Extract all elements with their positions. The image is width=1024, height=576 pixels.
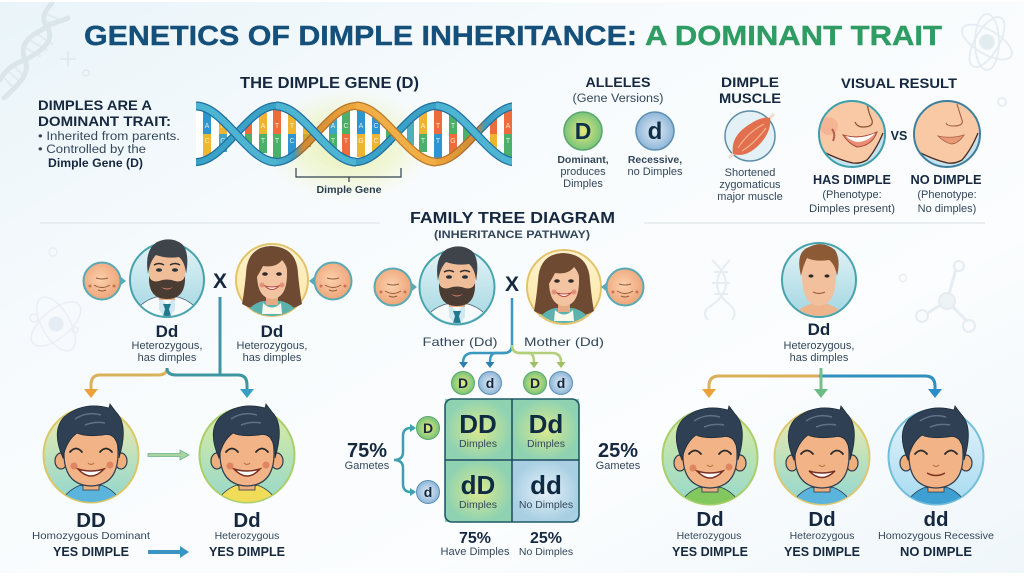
dna base letters: T — [451, 123, 456, 130]
stat: 75% have dimples: Have Dimples — [440, 546, 510, 558]
stat: 25% gametes: Gametes — [596, 460, 641, 472]
caption: Dd one: Heterozygous — [677, 530, 741, 542]
arrow: blue horizontal — [148, 546, 189, 558]
child DD portrait — [44, 404, 138, 505]
stat: 25% gametes: 25% — [598, 440, 638, 462]
panel: alleles: (Gene Versions) — [572, 93, 664, 105]
cross symbol: X — [213, 270, 227, 293]
icon: face without dimple — [911, 98, 983, 167]
caption: DD — [32, 509, 150, 559]
title: A DOMINANT TRAIT — [645, 20, 942, 51]
mother genotype: Dd — [261, 322, 283, 341]
dna base letters — [204, 123, 511, 145]
panel: visual result: (Phenotype: — [822, 189, 882, 201]
dna base letters: C — [373, 123, 379, 130]
dna base letters: C — [204, 138, 210, 145]
father genotype: Dd — [156, 322, 178, 341]
panel: left family — [32, 239, 352, 559]
panel: dimple muscle: MUSCLE — [719, 90, 781, 106]
panel: right family — [662, 243, 994, 559]
child dd portrait — [888, 406, 984, 507]
icon: dominant allele: D — [575, 118, 591, 144]
punnett square — [445, 399, 579, 522]
panel: visual result: NO DIMPLE — [910, 173, 982, 187]
dna base letters: C — [343, 123, 349, 130]
dna base letters: A — [331, 123, 336, 130]
cell dd: No Dimples — [519, 499, 573, 511]
caption: Dd: Heterozygous — [215, 530, 279, 542]
caption: Dd one: Dd — [696, 508, 724, 531]
cell dD: Dimples — [459, 499, 497, 511]
panel: visual result — [809, 75, 983, 215]
dominant caption: produces — [560, 166, 606, 178]
arrow: gamete pathway — [459, 298, 566, 368]
dna base letters: A — [205, 123, 210, 130]
caption: dd: dd — [923, 508, 949, 531]
caption: DD: YES DIMPLE — [53, 545, 129, 559]
icon: muscle — [725, 111, 775, 161]
father genotype — [132, 322, 202, 364]
caption: Dd two: Dd — [808, 508, 836, 531]
dna base letters: A — [421, 123, 426, 130]
text block: dominant trait intro — [38, 97, 180, 170]
mother portrait — [236, 244, 308, 324]
mother label: Mother (Dd) — [524, 335, 604, 349]
caption: Dd two: YES DIMPLE — [784, 545, 860, 559]
gamete alleles: d — [486, 375, 494, 391]
caption: dd: Homozygous Recessive — [878, 531, 994, 542]
panel: visual result: VISUAL RESULT — [841, 75, 957, 91]
heading: the dimple gene: THE DIMPLE GENE (D) — [240, 75, 419, 92]
child Dd portrait — [200, 404, 294, 505]
parent genotype: has dimples — [790, 352, 849, 364]
mother genotype: has dimples — [243, 352, 302, 364]
small mother dimple face — [601, 268, 644, 306]
child Dd blue portrait — [774, 406, 870, 507]
panel: alleles — [557, 74, 683, 190]
dna base letters: T — [436, 123, 441, 130]
gamete alleles: D — [530, 375, 540, 391]
dna base letters: T — [261, 138, 266, 145]
dna base letters: T — [421, 138, 426, 145]
heading: family tree diagram: FAMILY TREE DIAGRAM — [410, 210, 615, 227]
gene bracket — [296, 168, 401, 182]
stat: 75% have dimples — [440, 530, 510, 558]
icon: recessive allele: d — [648, 118, 662, 145]
title: GENETICS OF DIMPLE INHERITANCE: — [84, 20, 637, 51]
panel: dimple muscle: DIMPLE — [721, 74, 779, 90]
caption: Dd two: Heterozygous — [790, 530, 854, 542]
cell DD: Dimples — [459, 438, 497, 450]
decorative dna and molecule right — [705, 260, 975, 332]
arrow: green horizontal — [148, 450, 189, 460]
parent genotype: Dd — [808, 320, 830, 339]
panel: visual result: No dimples) — [918, 203, 976, 215]
stat: 25% no dimples: No Dimples — [519, 546, 573, 558]
cell DD: DD — [459, 409, 497, 439]
dna helix chart — [196, 86, 512, 196]
gamete alleles: D — [458, 375, 468, 391]
dna base letters: A — [359, 123, 364, 130]
dominant caption — [557, 154, 609, 190]
stat: 75% have dimples: 75% — [459, 530, 491, 547]
dna base letters: T — [275, 123, 280, 130]
panel: center punnett pathway — [345, 246, 644, 558]
dna base letters: C — [289, 138, 295, 145]
decorative atom left — [24, 248, 88, 357]
panel: dimple muscle: Shortened — [725, 167, 775, 179]
bracket arrow — [394, 424, 416, 496]
dna base letters: T — [331, 138, 336, 145]
mother portrait — [527, 250, 601, 331]
gene bracket label: Dimple Gene — [316, 185, 382, 196]
father label: Father (Dd) — [422, 335, 498, 349]
stat: 25% no dimples: 25% — [530, 530, 562, 547]
dna base letters: T — [275, 138, 280, 145]
panel: dimple muscle: zygomaticus — [719, 179, 781, 191]
arrow: left pathway — [84, 297, 254, 398]
cross symbol: X — [505, 273, 519, 296]
stat: 75% gametes: Gametes — [345, 460, 390, 472]
row alleles — [416, 416, 440, 504]
dna base letters: A — [221, 123, 226, 130]
cell Dd — [527, 409, 565, 450]
text block: dominant trait intro: Dimple Gene (D) — [48, 158, 143, 170]
parent genotype — [784, 320, 854, 364]
caption: Dd one — [672, 508, 748, 559]
small father dimple face — [374, 268, 417, 306]
panel: dimple muscle — [717, 74, 783, 203]
caption: Dd: Dd — [233, 509, 261, 532]
dna rungs — [196, 110, 512, 158]
dna base letters: T — [506, 138, 511, 145]
dna base letters: A — [506, 123, 511, 130]
panel: dimple muscle: major muscle — [717, 191, 783, 203]
text block: dominant trait intro: • Controlled by the — [38, 144, 146, 156]
recessive caption: no Dimples — [627, 166, 683, 178]
caption: Dd — [209, 509, 285, 559]
stat: 75% gametes: 75% — [347, 440, 387, 462]
icon: face with dimple — [816, 98, 888, 167]
small mother dimple face — [309, 262, 352, 300]
cell dD — [459, 470, 497, 511]
small father dimple face — [84, 262, 126, 300]
panel: visual result: Dimples present) — [809, 203, 895, 215]
panel: visual result: (Phenotype: — [917, 189, 977, 201]
caption: dd — [878, 508, 994, 559]
stat: 25% no dimples — [519, 530, 573, 558]
caption: DD: DD — [76, 509, 106, 532]
cell Dd: Dimples — [527, 438, 565, 450]
dna base letters: G — [358, 138, 364, 145]
gamete alleles — [452, 372, 572, 394]
heading: family tree diagram — [410, 210, 615, 241]
row alleles: D — [423, 420, 433, 436]
panel: alleles: ALLELES — [586, 74, 650, 90]
dna strands — [196, 106, 516, 162]
stat: 25% gametes — [596, 440, 641, 472]
mother genotype: Heterozygous, — [237, 340, 307, 352]
text block: dominant trait intro: DOMINANT TRAIT: — [38, 113, 171, 129]
father genotype: Heterozygous, — [132, 340, 202, 352]
dna base letters: G — [220, 138, 226, 145]
mother genotype — [237, 322, 307, 364]
text block: dominant trait intro: DIMPLES ARE A — [38, 97, 152, 113]
child Dd green portrait — [662, 406, 758, 507]
vs label: VS — [891, 129, 907, 143]
dna base letters: G — [450, 138, 456, 145]
text block: dominant trait intro: • Inherited from parents. — [38, 131, 180, 143]
cell dd — [519, 470, 573, 511]
caption: dd: NO DIMPLE — [900, 545, 972, 559]
cell dD: dD — [461, 470, 495, 500]
dna base letters: T — [290, 123, 295, 130]
stat: 75% gametes — [345, 440, 390, 472]
caption: Dd: YES DIMPLE — [209, 545, 285, 559]
cell dd: dd — [530, 470, 562, 500]
dominant caption: Dominant, — [557, 154, 609, 166]
decorative dna top left — [0, 3, 89, 98]
recessive caption — [627, 154, 683, 178]
parent genotype: Heterozygous, — [784, 340, 854, 352]
dna base letters: A — [261, 123, 266, 130]
gamete alleles: d — [557, 375, 565, 391]
heading: family tree diagram: (INHERITANCE PATHWAY) — [434, 229, 590, 241]
decorative atom top right — [957, 12, 1017, 106]
dna base letters: T — [436, 138, 441, 145]
dna base letters: C — [373, 138, 379, 145]
panel: visual result: HAS DIMPLE — [813, 173, 891, 187]
dna base letters: T — [344, 138, 349, 145]
father portrait — [420, 246, 494, 333]
arrow: right pathway — [702, 368, 942, 398]
parent portrait — [782, 243, 856, 320]
recessive caption: Recessive, — [628, 154, 682, 166]
caption: DD: Homozygous Dominant — [32, 531, 150, 542]
dominant caption: Dimples — [563, 178, 603, 190]
father genotype: has dimples — [138, 352, 197, 364]
caption: Dd one: YES DIMPLE — [672, 545, 748, 559]
father portrait — [130, 239, 204, 326]
row alleles: d — [424, 484, 432, 500]
cell Dd: Dd — [529, 409, 563, 439]
caption: Dd two — [784, 508, 860, 559]
